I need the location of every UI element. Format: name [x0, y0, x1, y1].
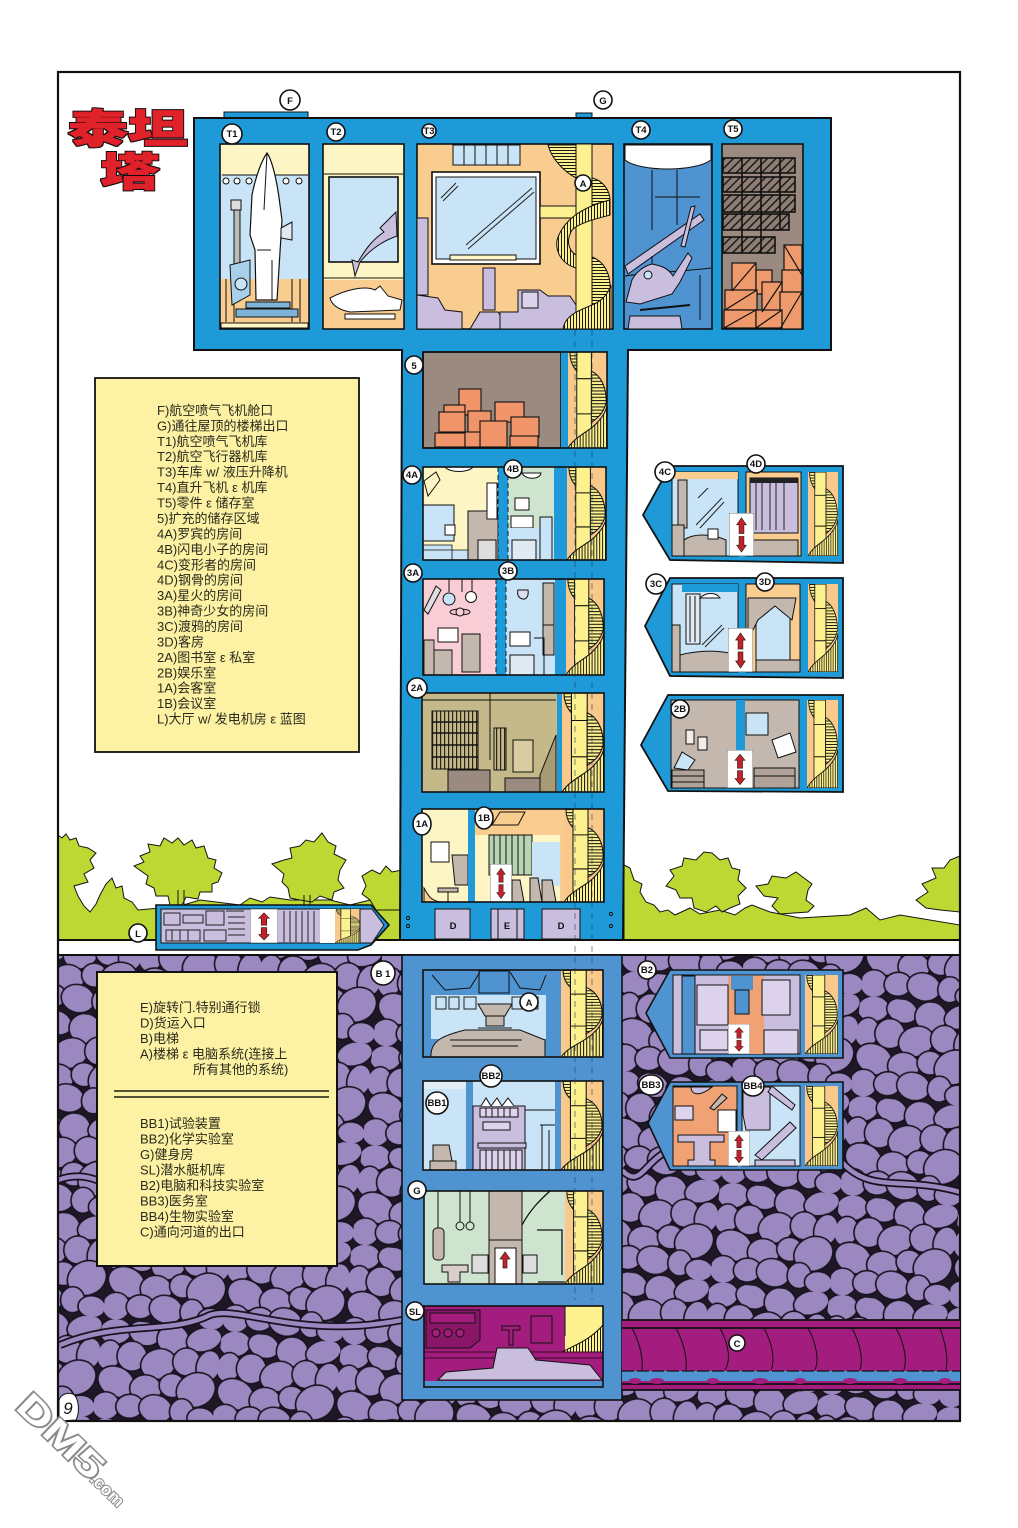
- watermark: DM5: [9, 1384, 113, 1487]
- legend panel: tower levels: T3)车库 w/ 液压升降机: [157, 465, 288, 480]
- basement room BB1: test rig: [423, 1081, 466, 1170]
- legend panel: tower levels: 3C)渡鸦的房间: [157, 619, 243, 634]
- legend panel: basement levels: G)健身房: [140, 1147, 193, 1162]
- legend panel: tower levels: [95, 378, 359, 752]
- legend panel: tower levels: 1B)会议室: [157, 696, 216, 711]
- legend panel: tower levels: T5)零件 ε 储存室: [157, 496, 255, 510]
- legend panel: basement levels: BB3)医务室: [140, 1194, 208, 1208]
- legend panel: basement levels: B2)电脑和科技实验室: [140, 1178, 264, 1193]
- doors at ground level: D: [558, 921, 565, 932]
- legend panel: tower levels: 3A)星火的房间: [157, 588, 242, 603]
- callout labels: G: [413, 1186, 421, 1197]
- wing: rooms 3C and 3D: [645, 578, 843, 678]
- watermark: .com: [86, 1470, 128, 1511]
- watermark: [9, 1384, 141, 1514]
- room 4B: Kid Flash's room: [508, 467, 554, 560]
- callout labels: BB1: [427, 1098, 447, 1109]
- callout labels: A: [526, 998, 533, 1009]
- basement room SL: submarine bay: [424, 1306, 603, 1387]
- callout labels: [129, 90, 774, 1351]
- page number: [59, 1393, 78, 1421]
- floor 4 stairs and frame: [423, 467, 606, 560]
- legend panel: tower levels: 2B)娱乐室: [157, 665, 216, 680]
- callout labels: T1: [226, 129, 238, 140]
- callout labels: B 1: [376, 969, 391, 980]
- basement room: test equipment and computers A: [423, 970, 603, 1057]
- room 3B: Wonder Girl's room: [506, 579, 555, 675]
- legend panel: basement levels: BB4)生物实验室: [140, 1209, 234, 1224]
- legend panel: tower levels: T1)航空喷气飞机库: [157, 434, 268, 449]
- callout labels: A: [580, 179, 587, 190]
- floor 3 stairs and frame: [423, 579, 604, 675]
- title: 泰坦: [68, 97, 188, 155]
- callout labels: 2A: [411, 683, 423, 694]
- shaft alignment guide lines: [575, 330, 592, 1300]
- legend panel: tower levels: T4)直升飞机 ε 机库: [157, 480, 268, 495]
- callout labels: SL: [409, 1307, 421, 1318]
- legend panel: tower levels: F)航空喷气飞机舱口: [157, 403, 273, 418]
- legend panel: basement levels: B)电梯: [140, 1031, 179, 1046]
- room T4: helicopter hangar: [624, 144, 712, 329]
- callout labels: 3C: [650, 579, 662, 590]
- basement room G: gym: [424, 1191, 603, 1284]
- wing: rooms BB3 infirmary and BB4 bio lab: [648, 1082, 843, 1170]
- page frame: [58, 72, 960, 1421]
- callout labels: G: [599, 96, 607, 107]
- callout labels: F: [287, 96, 293, 107]
- room 4A: Robin's room: [423, 467, 498, 560]
- legend panel: basement levels: [97, 972, 337, 1266]
- legend panel: basement levels: E)旋转门.特别通行锁: [140, 1000, 261, 1015]
- legend panel: tower levels: T2)航空飞行器机库: [157, 449, 268, 464]
- doors at ground level: D: [450, 921, 457, 932]
- legend panel: basement levels: BB1)试验装置: [140, 1116, 221, 1131]
- legend panel: basement levels: A)楼梯 ε 电脑系统(连接上: [140, 1046, 287, 1062]
- tunnel C: exit to the river: [622, 1320, 960, 1390]
- room T5: parts storage with shelves and crates: [722, 144, 803, 329]
- room 3A: Starfire's room: [423, 579, 496, 675]
- legend panel: tower levels: 4C)变形者的房间: [157, 557, 256, 572]
- page number: 9: [63, 1399, 73, 1418]
- room T3: garage with hydraulic lift and stairs: [417, 144, 613, 329]
- callout labels: 3B: [502, 566, 514, 577]
- callout labels: 1A: [416, 819, 428, 830]
- landscape: trees and grass on the left: [58, 833, 402, 940]
- room T2: aircraft hangar: [323, 144, 404, 329]
- callout labels: T4: [635, 125, 647, 136]
- callout labels: T2: [330, 127, 342, 138]
- callout labels: T5: [727, 124, 739, 135]
- legend panel: tower levels: 1A)会客室: [157, 681, 216, 696]
- callout labels: BB3: [641, 1080, 661, 1091]
- wing: rooms 4C and 4D: [643, 466, 843, 563]
- room T1: jet hangar: [220, 144, 309, 329]
- callout labels: 2B: [674, 704, 686, 715]
- legend panel: tower levels: 4B)闪电小子的房间: [157, 542, 268, 557]
- callout labels: 4A: [406, 470, 418, 481]
- legend panel: tower levels: 4D)钢骨的房间: [157, 573, 243, 588]
- room 5: expanded storage: [423, 352, 607, 448]
- callout labels: 3A: [407, 568, 419, 579]
- wing: room B2 computer and tech lab: [646, 970, 843, 1058]
- callout labels: BB2: [481, 1071, 501, 1082]
- doors at ground level: E: [504, 921, 510, 932]
- tower structure: upper floors: [194, 112, 831, 940]
- callout labels: 5: [411, 361, 417, 372]
- callout labels: T3: [423, 126, 435, 137]
- callout labels: B2: [641, 965, 653, 976]
- wing: room 2B game room: [641, 695, 843, 792]
- room 2A: library and den: [422, 693, 604, 792]
- legend panel: tower levels: 5)扩充的储存区域: [157, 511, 260, 526]
- legend panel: basement levels: C)通向河道的出口: [140, 1224, 245, 1240]
- legend panel: tower levels: 3B)神奇少女的房间: [157, 604, 268, 619]
- legend panel: tower levels: 2A)图书室 ε 私室: [157, 650, 255, 665]
- legend panel: basement levels: 所有其他的系统): [193, 1062, 288, 1077]
- doors at ground level: [406, 909, 613, 939]
- landscape: trees and grass on the right: [624, 852, 960, 940]
- underground rock field: [58, 955, 960, 1421]
- basement room BB2: chemistry lab and stairs: [423, 1081, 603, 1170]
- room 1B: conference room: [422, 809, 604, 902]
- legend panel: basement levels: SL)潜水艇机库: [140, 1162, 225, 1178]
- legend panel: basement levels: D)货运入口: [140, 1016, 206, 1030]
- callout labels: BB4: [743, 1081, 763, 1092]
- callout labels: 4C: [659, 467, 671, 478]
- callout labels: C: [734, 1339, 741, 1350]
- room 1A: reception: [422, 809, 468, 902]
- legend panel: tower levels: 4A)罗宾的房间: [157, 526, 242, 541]
- callout labels: 4B: [507, 464, 519, 475]
- callout labels: 4D: [750, 459, 762, 470]
- lobby wing L with generator room and blueprints: [156, 905, 389, 950]
- callout labels: L: [135, 929, 141, 940]
- legend panel: tower levels: G)通往屋顶的楼梯出口: [157, 418, 288, 433]
- callout labels: 1B: [478, 813, 490, 824]
- ground line: [58, 940, 960, 955]
- title: [68, 97, 188, 198]
- legend panel: tower levels: 3D)客房: [157, 634, 204, 649]
- legend panel: tower levels: L)大厅 w/ 发电机房 ε 蓝图: [157, 712, 306, 727]
- callout labels: 3D: [759, 577, 771, 588]
- title: 塔: [100, 140, 160, 198]
- legend panel: basement levels: BB2)化学实验室: [140, 1132, 234, 1146]
- tower structure: basement shaft: [402, 955, 622, 1400]
